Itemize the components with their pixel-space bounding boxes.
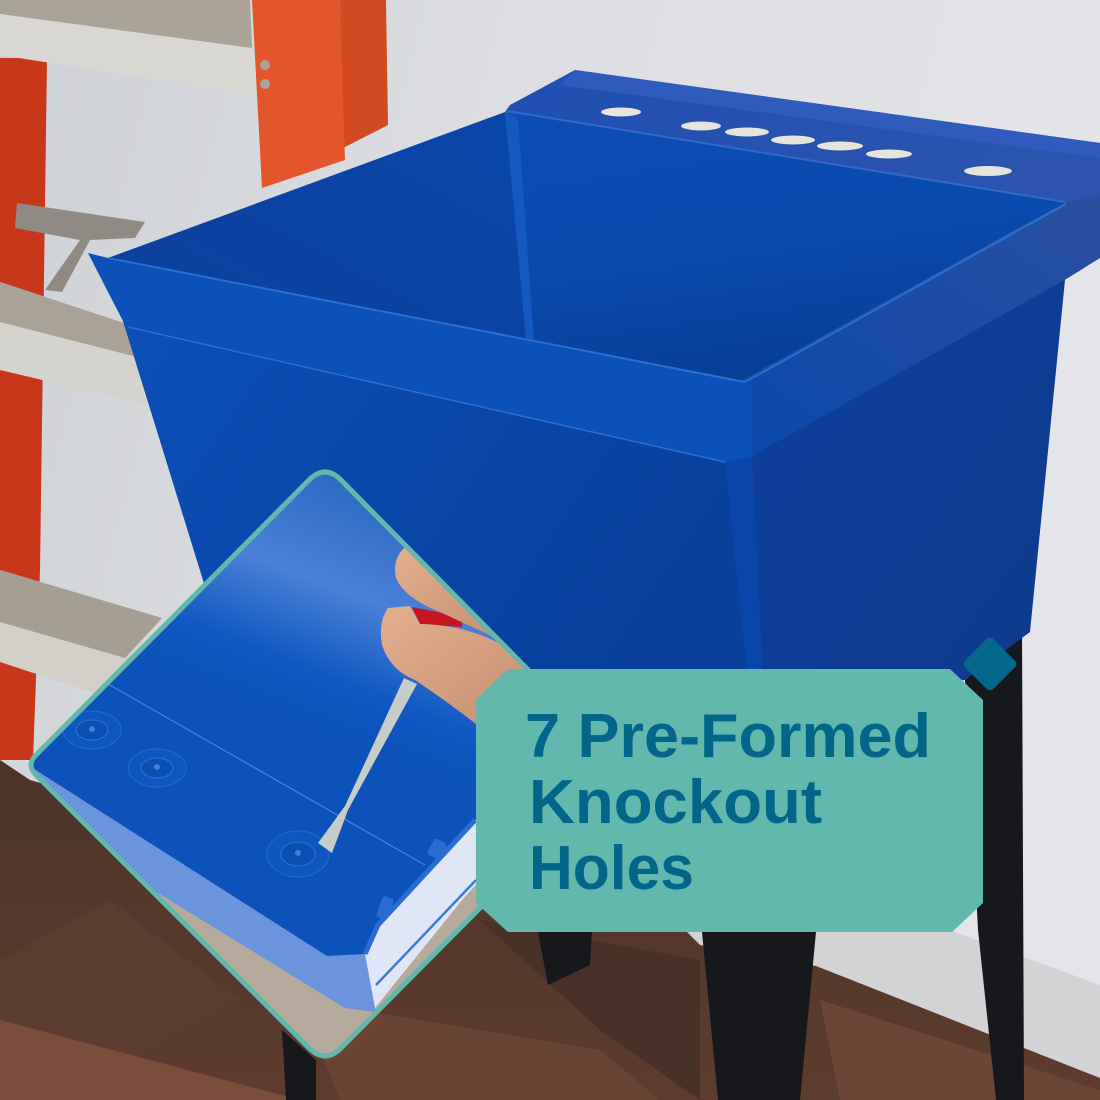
- baseboard: [680, 930, 1100, 1078]
- decorative teal diamond icon: [962, 636, 1018, 692]
- corner seam: [725, 452, 764, 700]
- knockout hole 1: [601, 108, 641, 116]
- inset fold line: [108, 684, 425, 865]
- inset hand: [381, 548, 540, 724]
- ladder middle rung: [0, 282, 148, 405]
- front wall: [122, 318, 765, 700]
- rim highlight: [108, 204, 1066, 382]
- ladder lower rung: [0, 570, 162, 695]
- deck raised lip: [560, 70, 1100, 158]
- inset photo: knocking out a hole: [28, 469, 531, 1059]
- knockout hole 3: [725, 128, 769, 136]
- inset light blue lip: [34, 769, 376, 1012]
- inset floor and wood board: [156, 885, 479, 1054]
- inset knob 3: [267, 831, 329, 877]
- heading text: [525, 702, 931, 903]
- front leg: [702, 932, 816, 1100]
- inset knob 2: [128, 749, 186, 787]
- ladder left rail: [0, 58, 47, 760]
- right wall: [745, 270, 1066, 700]
- inset screwdriver shaft: [318, 678, 417, 853]
- front rim shadow line: [128, 327, 725, 462]
- inset teal border: [31, 472, 622, 1056]
- inset blue edge strip: [365, 820, 475, 954]
- right leg: [965, 632, 1024, 1100]
- panel shape: [476, 669, 983, 932]
- knockout hole 4: [771, 136, 815, 144]
- sink deck with faucet holes: [505, 70, 1100, 210]
- inset knob 1: [63, 711, 121, 749]
- ladder: [0, 0, 388, 760]
- inner left wall: [108, 112, 530, 340]
- inner back wall: [505, 112, 1065, 382]
- ladder orange rail: [252, 0, 388, 188]
- inset small tab 2: [428, 838, 446, 858]
- heading text: Knockout: [529, 768, 822, 837]
- inset small tab 1: [376, 896, 394, 919]
- knockout hole 2: [681, 122, 721, 130]
- caption panel: [476, 669, 983, 932]
- sink legs: [282, 632, 1024, 1100]
- rear leg: [538, 932, 592, 985]
- knockout hole 5: [817, 142, 863, 150]
- wood floor: [0, 760, 1100, 1100]
- heading text: Holes: [529, 834, 694, 903]
- inset sink underside: [34, 474, 498, 956]
- front rim: [88, 253, 752, 462]
- inset screwdriver handle: [412, 607, 462, 627]
- inner corner seam: [505, 112, 534, 340]
- leg under inset: [282, 1030, 316, 1100]
- ladder bracket: [15, 203, 145, 292]
- right rim: [740, 195, 1100, 456]
- heading text: 7 Pre-Formed: [525, 702, 931, 771]
- knockout hole 7: [964, 166, 1012, 176]
- ladder top rung: [0, 0, 255, 95]
- back rim highlight: [507, 111, 1066, 202]
- knockout hole 6: [866, 150, 912, 158]
- inset side groove: [376, 880, 476, 985]
- inset white side wall: [365, 820, 475, 1008]
- blue sink tub: [88, 70, 1100, 700]
